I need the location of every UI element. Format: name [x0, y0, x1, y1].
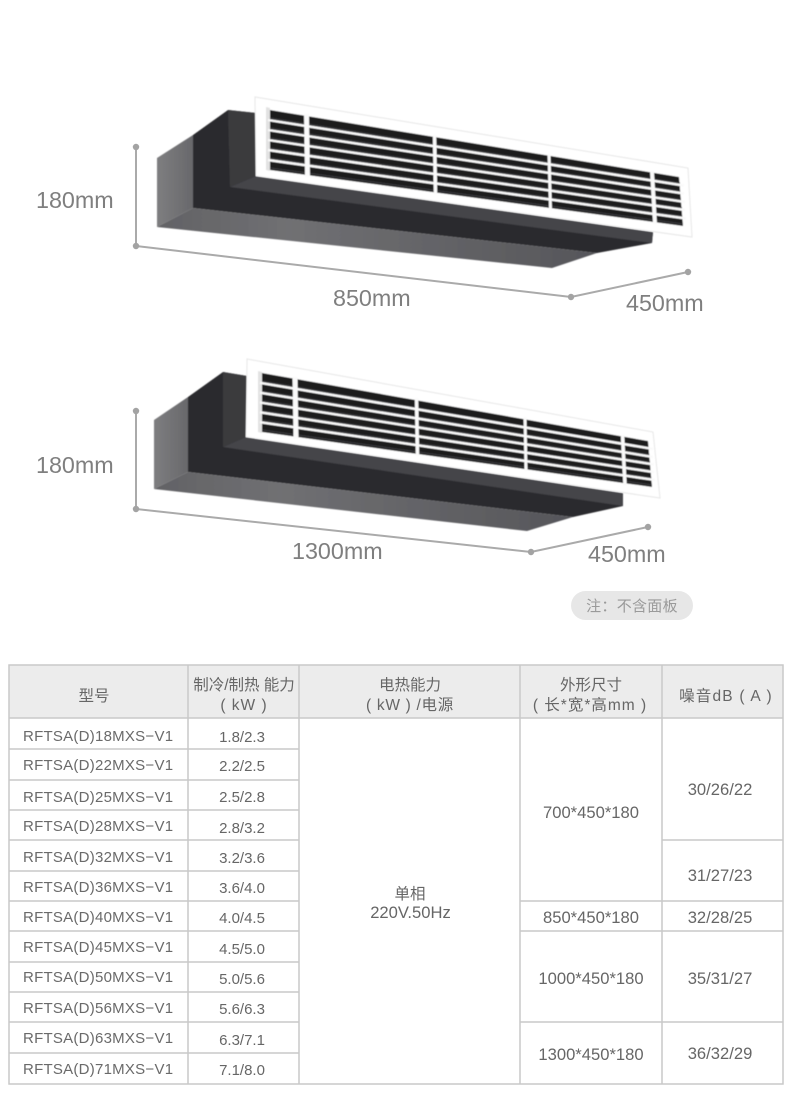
table header: 电热能力 [379, 676, 441, 694]
column: model numbers: RFTSA(D)56MXS−V1 [23, 1000, 173, 1017]
column: model numbers: RFTSA(D)32MXS−V1 [23, 849, 173, 866]
column: dimensions [538, 803, 644, 1064]
column: cooling and heating capacity: 1.8/2.3 [219, 729, 265, 746]
column: cooling and heating capacity: 6.3/7.1 [219, 1032, 265, 1049]
column: cooling and heating capacity: 3.2/3.6 [219, 850, 265, 867]
unit body: 850mm [157, 110, 653, 268]
column: cooling and heating capacity: 4.5/5.0 [219, 941, 265, 958]
product illustration: 1300mm duct unit [36, 359, 666, 567]
note pill [571, 591, 693, 620]
column: cooling and heating capacity: 7.1/8.0 [219, 1062, 265, 1079]
column: cooling and heating capacity: 5.6/6.3 [219, 1001, 265, 1018]
table header: ( kW ) [220, 697, 268, 714]
column: model numbers: RFTSA(D)63MXS−V1 [23, 1030, 173, 1047]
table header: ( 长*宽*高mm ) [533, 696, 647, 714]
column: cooling and heating capacity: 3.6/4.0 [219, 880, 265, 897]
dimension lines: 850mm unit [133, 144, 691, 300]
column: noise: 31/27/23 [688, 866, 752, 885]
label: length 850mm: 850mm [333, 285, 411, 311]
column: power supply [370, 885, 451, 922]
column: noise: 35/31/27 [688, 969, 752, 988]
column: dimensions: 1300*450*180 [538, 1045, 644, 1064]
column: dimensions: 1000*450*180 [538, 969, 644, 988]
front panel and grille: 1300mm [246, 359, 660, 498]
table grid lines [9, 665, 783, 1084]
table header: ( kW ) /电源 [366, 696, 454, 714]
column: model numbers [23, 728, 173, 1078]
label: depth 450mm: 450mm [588, 541, 666, 567]
column: noise [688, 780, 752, 1063]
specification table [9, 665, 783, 1084]
note pill: 注：不含面板 [586, 597, 678, 615]
column: cooling and heating capacity: 4.0/4.5 [219, 910, 265, 927]
column: cooling and heating capacity: 5.0/5.6 [219, 971, 265, 988]
table header: 外形尺寸 [560, 676, 622, 694]
table header: 噪音dB ( A ) [679, 687, 773, 705]
column: power supply: 单相 [394, 885, 426, 903]
column: cooling and heating capacity [219, 729, 265, 1079]
column: dimensions: 700*450*180 [543, 803, 639, 822]
column: noise: 30/26/22 [688, 780, 752, 799]
column: model numbers: RFTSA(D)50MXS−V1 [23, 969, 173, 986]
column: model numbers: RFTSA(D)18MXS−V1 [23, 728, 173, 745]
column: cooling and heating capacity: 2.8/3.2 [219, 820, 265, 837]
unit body: 1300mm [154, 372, 623, 531]
table header [9, 665, 783, 718]
table header: 型号 [78, 687, 110, 705]
front panel and grille: 850mm [255, 97, 692, 237]
column: model numbers: RFTSA(D)45MXS−V1 [23, 939, 173, 956]
table header: 制冷/制热 能力 [193, 676, 295, 694]
column: model numbers: RFTSA(D)22MXS−V1 [23, 757, 173, 774]
column: model numbers: RFTSA(D)40MXS−V1 [23, 909, 173, 926]
dimension lines: 1300mm unit [133, 408, 651, 555]
column: model numbers: RFTSA(D)71MXS−V1 [23, 1061, 173, 1078]
column: dimensions: 850*450*180 [543, 908, 639, 927]
column: noise: 32/28/25 [688, 908, 752, 927]
label: height 180mm: 180mm [36, 187, 114, 213]
label: height 180mm: 180mm [36, 452, 114, 478]
column: power supply: 220V.50Hz [370, 903, 451, 922]
column: cooling and heating capacity: 2.5/2.8 [219, 789, 265, 806]
column: noise: 36/32/29 [688, 1044, 752, 1063]
column: model numbers: RFTSA(D)25MXS−V1 [23, 789, 173, 806]
column: cooling and heating capacity: 2.2/2.5 [219, 758, 265, 775]
label: length 1300mm: 1300mm [292, 538, 383, 564]
column: model numbers: RFTSA(D)36MXS−V1 [23, 879, 173, 896]
column: model numbers: RFTSA(D)28MXS−V1 [23, 818, 173, 835]
label: depth 450mm: 450mm [626, 290, 704, 316]
product illustration: 850mm duct unit [36, 97, 704, 316]
